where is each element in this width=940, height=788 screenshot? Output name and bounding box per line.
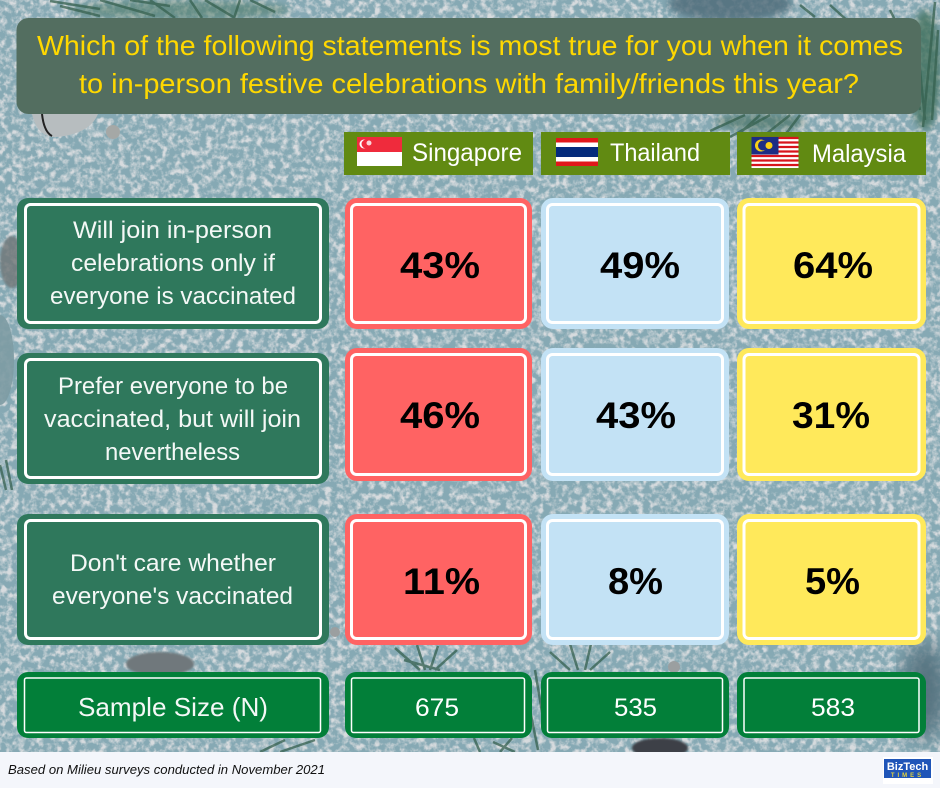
footer bar — [0, 752, 940, 788]
cell: Singapore 11% — [345, 514, 532, 645]
cell: Thailand 43%: 43% — [596, 395, 676, 436]
cell: Malaysia 5%: 5% — [805, 561, 860, 602]
title text: to in-person festive celebrations with family/friends this year? — [79, 68, 859, 99]
row label: only if everyone is vaccinated: Will join in-person — [73, 217, 272, 244]
row label: only if everyone is vaccinated: everyone is vaccinated — [50, 283, 296, 310]
cell: Malaysia 5% — [737, 514, 926, 645]
title text: Which of the following statements is most true for you when it comes — [37, 30, 903, 61]
title text — [37, 30, 903, 99]
sample size: Malaysia 583 — [737, 672, 926, 738]
row label: prefer vaccinated: nevertheless — [105, 439, 240, 466]
icon: Singapore flag — [357, 137, 402, 166]
cell: Singapore 11%: 11% — [403, 561, 480, 602]
country header: Singapore — [344, 132, 533, 175]
cell: Singapore 43% — [345, 198, 532, 329]
cell: Thailand 8% — [541, 514, 729, 645]
cell: Singapore 46%: 46% — [400, 395, 480, 436]
sample size: Singapore 675: 675 — [415, 694, 459, 722]
sample size: Singapore 675 — [345, 672, 532, 738]
cell: Malaysia 64%: 64% — [793, 245, 873, 286]
country header: Thailand — [541, 132, 730, 175]
row label: prefer vaccinated: vaccinated, but will join — [44, 406, 301, 433]
sample size: Thailand 535: 535 — [614, 694, 657, 722]
source note: Based on Milieu surveys conducted in November 2021 — [8, 762, 325, 777]
logo: BizTech Times: BizTech — [887, 761, 928, 773]
country header: Singapore: Singapore — [412, 139, 522, 167]
icon: Malaysia flag — [752, 137, 798, 168]
decoration: silver bell and ball — [32, 114, 680, 673]
country header: Malaysia: Malaysia — [812, 140, 906, 168]
icon: Thailand flag — [556, 138, 598, 166]
row label: don't care — [17, 514, 329, 645]
cell: Singapore 46% — [345, 348, 532, 481]
row label: prefer vaccinated: Prefer everyone to be — [58, 373, 288, 400]
row label: sample size: Sample Size (N) — [78, 692, 268, 722]
row label: don't care: everyone's vaccinated — [52, 583, 293, 610]
cell: Thailand 8%: 8% — [608, 561, 663, 602]
logo: BizTech Times: TIMES — [891, 773, 924, 779]
row label: sample size — [17, 672, 329, 738]
cell: Thailand 49%: 49% — [600, 245, 680, 286]
cell: Thailand 43% — [541, 348, 729, 481]
row label: only if everyone is vaccinated — [17, 198, 329, 329]
row label: only if everyone is vaccinated: celebrations only if — [71, 250, 275, 277]
sample size: Malaysia 583: 583 — [811, 694, 855, 722]
cell: Singapore 43%: 43% — [400, 245, 480, 286]
sample size: Thailand 535 — [541, 672, 729, 738]
country header: Thailand: Thailand — [610, 139, 700, 167]
row label: don't care: Don't care whether — [70, 550, 276, 577]
cell: Malaysia 31% — [737, 348, 926, 481]
row label: prefer vaccinated — [17, 353, 329, 484]
cell: Malaysia 31%: 31% — [792, 395, 870, 436]
cell: Malaysia 64% — [737, 198, 926, 329]
title panel — [16, 18, 921, 114]
cell: Thailand 49% — [541, 198, 729, 329]
logo: BizTech Times — [883, 757, 933, 784]
country header: Malaysia — [737, 132, 926, 175]
